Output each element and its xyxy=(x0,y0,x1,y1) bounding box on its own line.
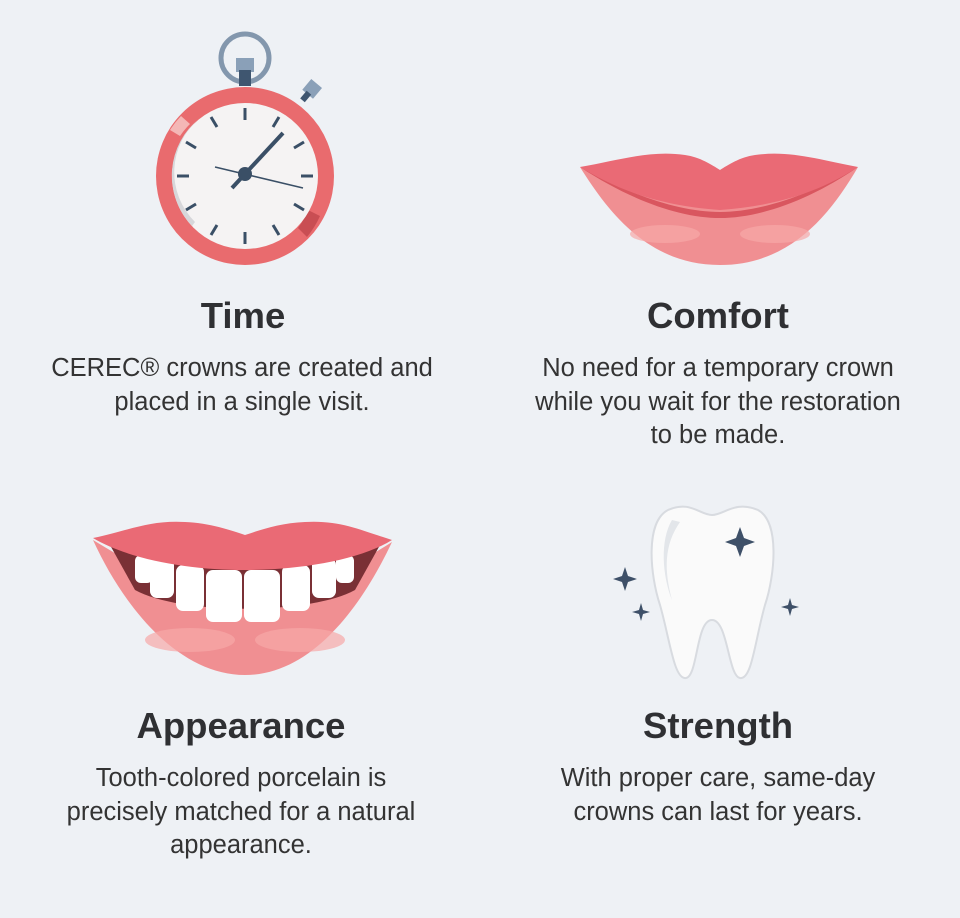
heading: Time: Time xyxy=(201,295,285,336)
text: Strength: With proper care, same-day xyxy=(561,764,875,792)
text: Strength: crowns can last for years. xyxy=(573,798,863,826)
text: Comfort: No need for a temporary crown xyxy=(542,354,894,382)
icon: smile xyxy=(93,522,392,675)
text: Time: CEREC® crowns are created and xyxy=(51,354,433,382)
text: Time xyxy=(51,354,433,416)
text: Appearance: Tooth-colored porcelain is xyxy=(96,764,386,792)
text: Comfort: to be made. xyxy=(651,421,785,449)
icon: tooth with sparkles xyxy=(613,507,799,678)
icon: closed lips xyxy=(580,154,858,265)
text: Appearance xyxy=(67,764,415,859)
heading: Comfort: Comfort xyxy=(647,295,789,336)
text: Comfort xyxy=(535,354,901,449)
text: Comfort: while you wait for the restoration xyxy=(535,388,901,416)
text: Appearance: precisely matched for a natural xyxy=(67,798,415,826)
text: Time: placed in a single visit. xyxy=(114,388,370,416)
heading: Strength: Strength xyxy=(643,705,793,746)
heading: Appearance: Appearance xyxy=(137,705,345,746)
text: Appearance: appearance. xyxy=(170,831,312,859)
icon: stopwatch xyxy=(156,34,334,265)
text: Strength xyxy=(560,764,876,826)
